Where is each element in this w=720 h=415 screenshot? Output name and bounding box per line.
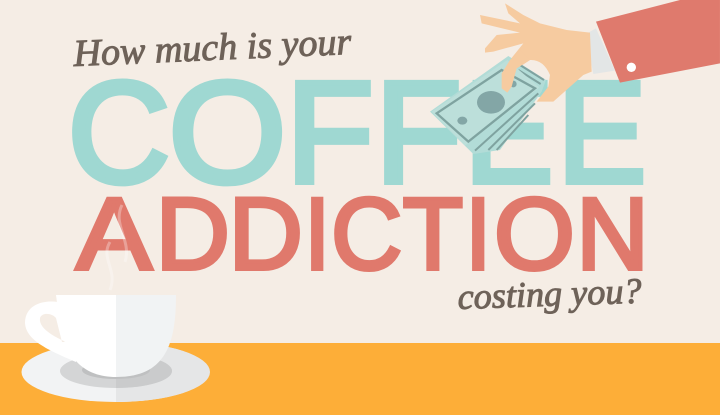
sleeve button xyxy=(627,63,636,72)
heading: ADDICTION: C xyxy=(331,177,402,291)
heading: ADDICTION: D xyxy=(156,177,230,291)
index finger xyxy=(502,50,530,93)
heading: COFFEE: F xyxy=(286,52,374,213)
heading: COFFEE: E xyxy=(464,52,553,213)
heading: COFFEE: F xyxy=(376,52,462,213)
table surface xyxy=(0,343,720,415)
heading: ADDICTION xyxy=(76,177,649,291)
heading: ADDICTION: T xyxy=(403,177,463,291)
stack of banknotes xyxy=(430,56,546,154)
heading: costing you: costing you? xyxy=(457,271,642,317)
heading: ADDICTION: I xyxy=(465,177,491,291)
heading: ADDICTION: N xyxy=(576,177,649,291)
heading: COFFEE: E xyxy=(558,52,646,213)
heading: COFFEE: C xyxy=(68,52,170,213)
heading: ADDICTION: O xyxy=(494,177,575,291)
icon: coffee steam xyxy=(107,205,127,290)
heading: COFFEE xyxy=(68,52,646,213)
hand xyxy=(480,3,592,102)
heading: ADDICTION: I xyxy=(304,177,330,291)
icon: hand holding money xyxy=(430,0,720,154)
heading: COFFEE: O xyxy=(169,52,286,213)
heading: ADDICTION: D xyxy=(229,177,303,291)
heading: ADDICTION: A xyxy=(76,177,152,291)
heading: how much is your: How much is your xyxy=(72,21,352,75)
icon: coffee cup and saucer xyxy=(22,295,210,402)
jacket sleeve xyxy=(596,0,720,83)
shirt cuff xyxy=(588,28,615,74)
